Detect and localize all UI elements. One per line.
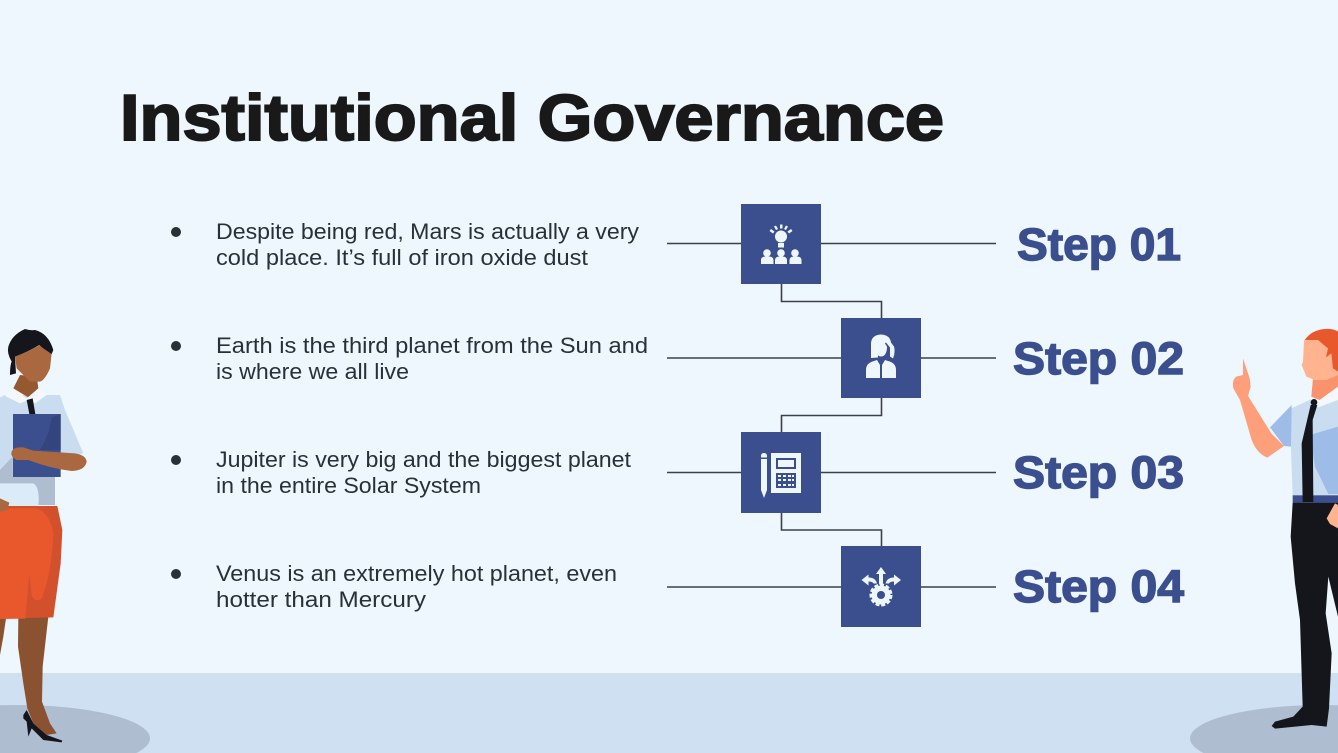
label: step 03: Step 03: [1013, 447, 1184, 498]
text block: step 02: Earth is the third planet from the Sun and: [216, 333, 648, 358]
text block: step 04: [171, 561, 617, 612]
text block: step 03: in the entire Solar System: [216, 473, 481, 498]
floor band: [0, 673, 1338, 753]
title: Institutional Governance: [120, 81, 944, 154]
illustration: woman with folder: [0, 329, 150, 753]
text block: step 04: hotter than Mercury: [216, 587, 427, 612]
text block: step 02: [171, 333, 648, 384]
text block: step 01: [171, 219, 640, 270]
text block: step 01: cold place. It’s full of iron oxide dust: [216, 245, 589, 270]
text block: step 01: Despite being red, Mars is actually a very: [216, 219, 640, 244]
label: step 04: Step 04: [1013, 561, 1184, 612]
label: step 02: Step 02: [1013, 333, 1184, 384]
icon box 1: idea and team: [741, 204, 821, 284]
text block: step 03: Jupiter is very big and the biggest planet: [216, 447, 632, 472]
text block: step 03: [171, 447, 632, 498]
icon box 3: phone and pen: [741, 432, 821, 513]
text block: step 02: is where we all live: [216, 359, 409, 384]
icon box 2: woman: [841, 318, 921, 398]
illustration: man pointing up: [1190, 329, 1338, 753]
icon box 4: gear with arrows: [841, 546, 921, 627]
text block: step 04: Venus is an extremely hot planet, even: [216, 561, 617, 586]
label: step 01: Step 01: [1017, 219, 1181, 270]
connector lines: [667, 244, 996, 587]
